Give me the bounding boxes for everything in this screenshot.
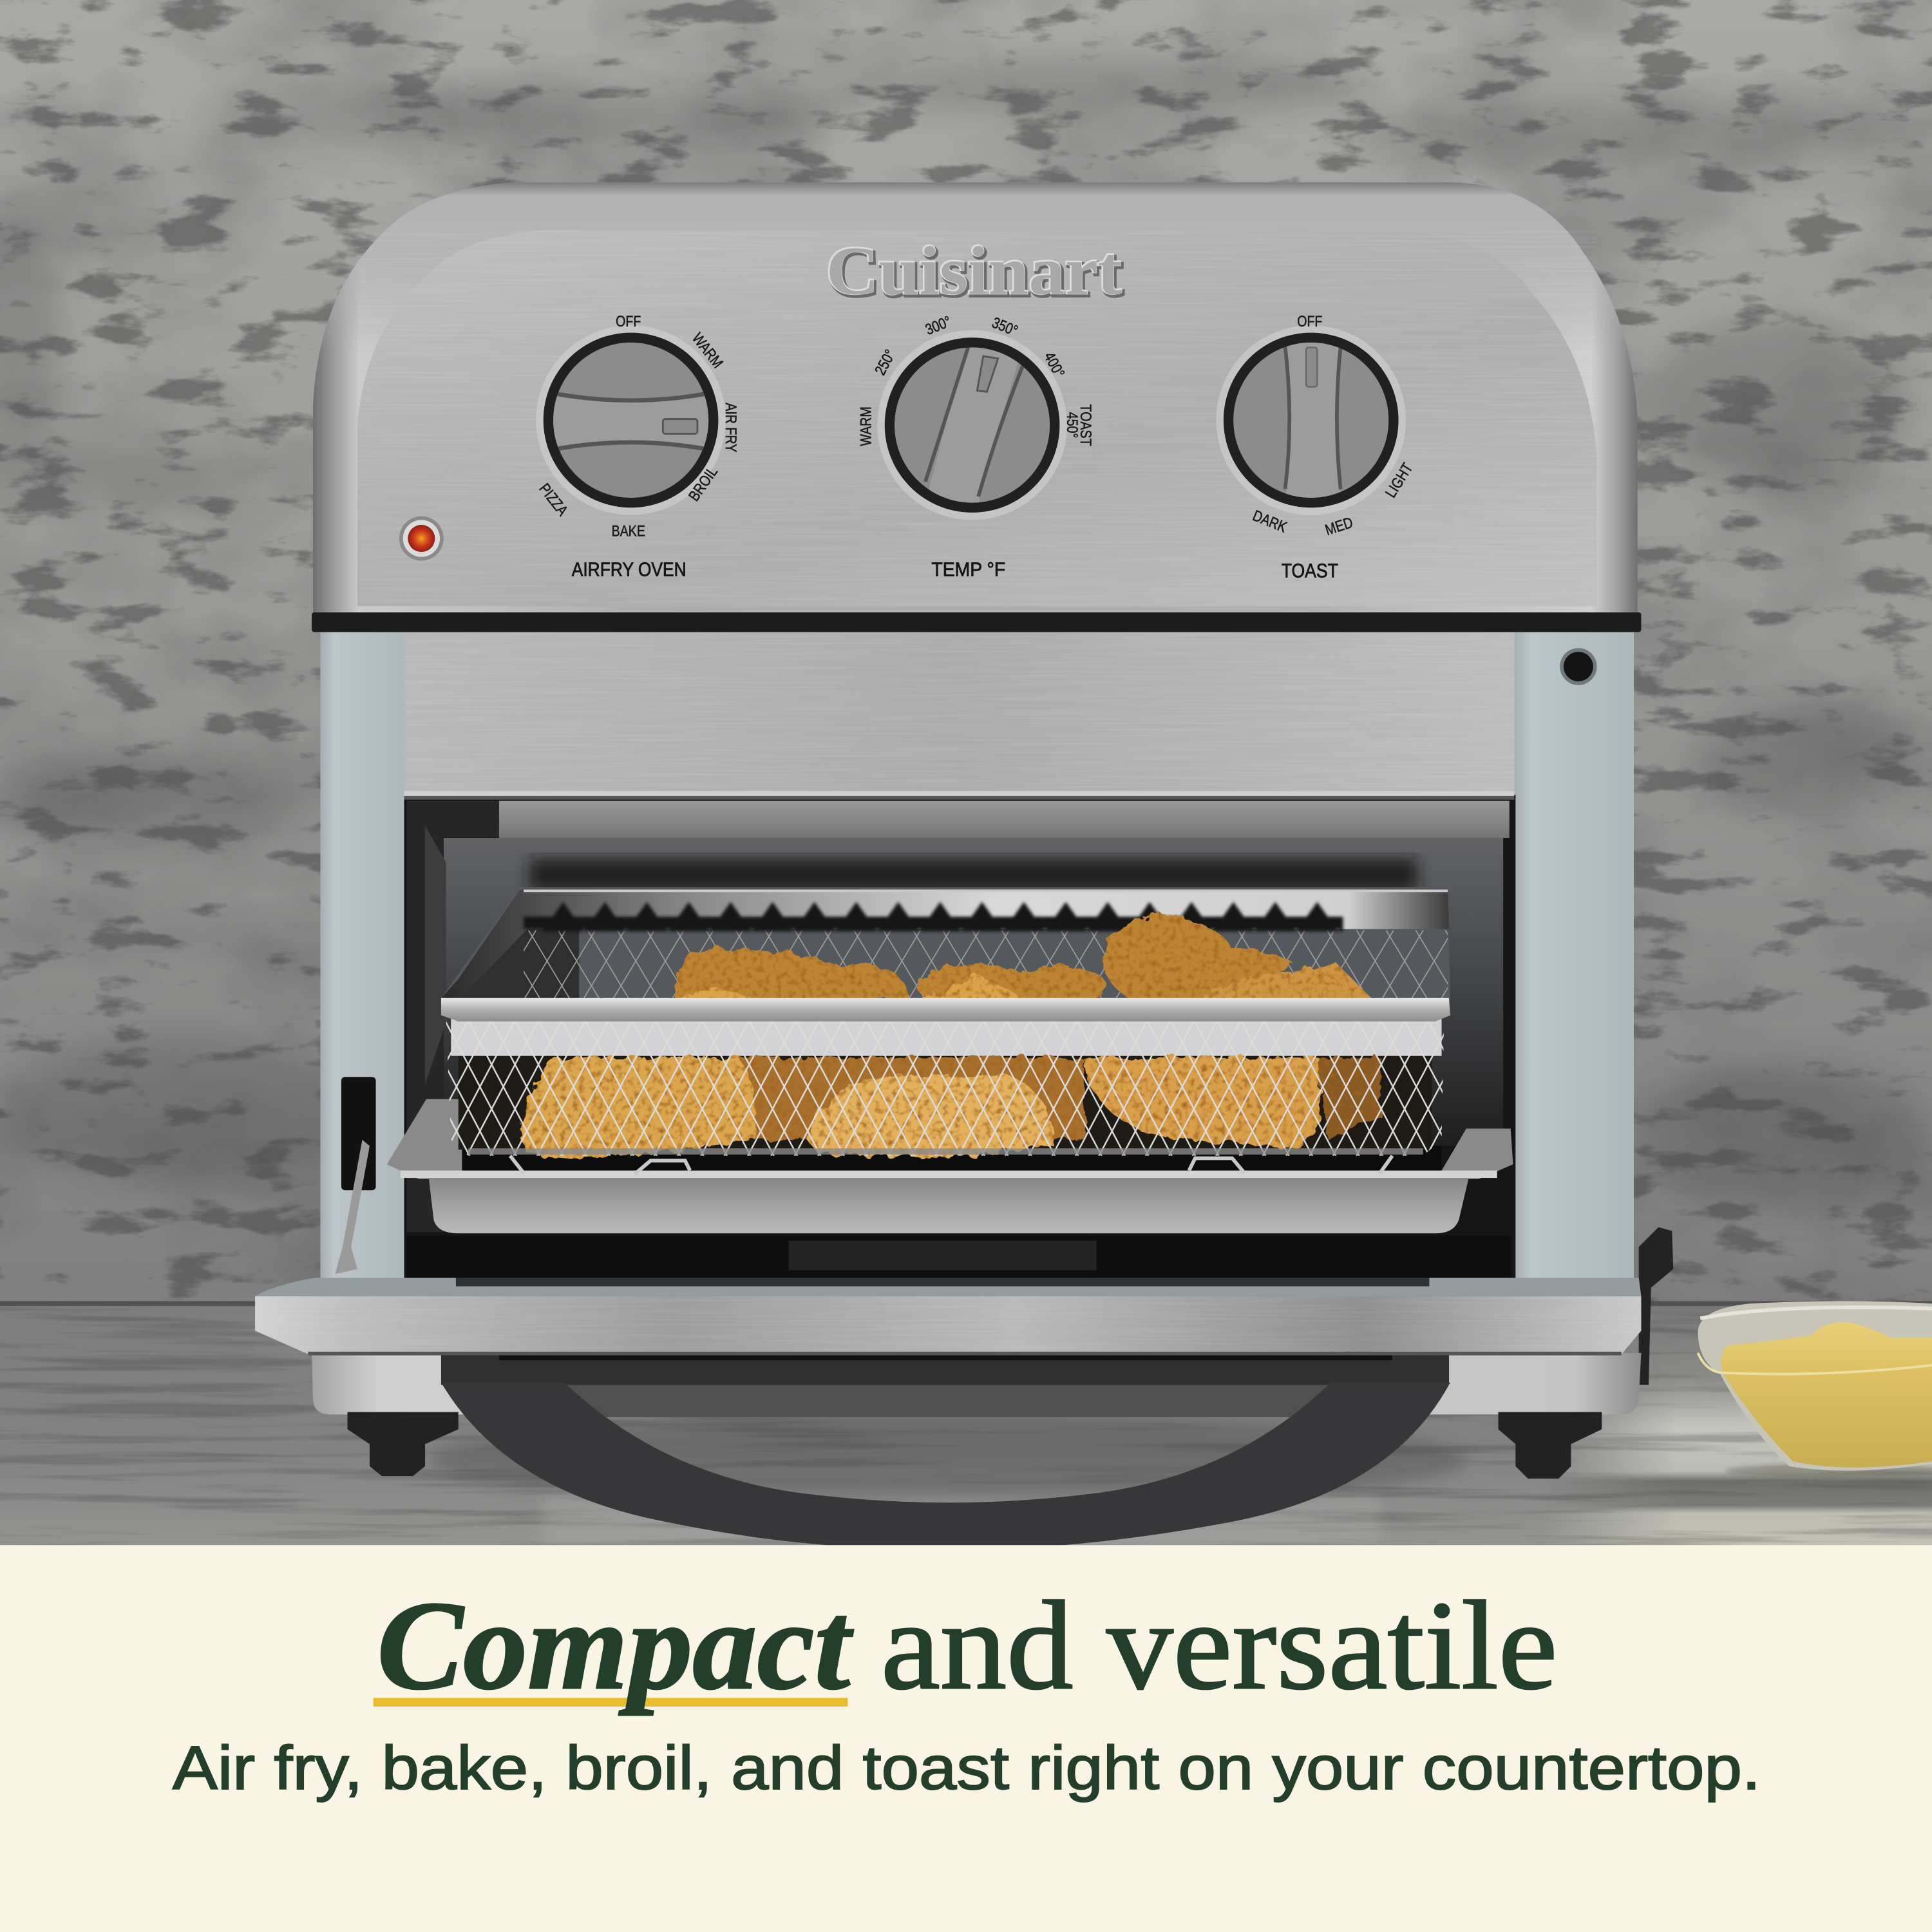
airfry oven dial labels: AIR FRY [722,402,740,453]
bottom wire [468,1148,1423,1155]
oven body [320,629,1634,1287]
headline: and versatile [881,1575,1557,1716]
housing outer shell [313,182,1638,614]
toast dial labels: OFF [1297,312,1322,330]
temperature knob [877,330,1067,520]
headline [377,1575,1557,1716]
dial captions [572,558,1338,582]
temperature dial labels: TOAST [1077,404,1095,446]
airfry oven dial labels [536,312,740,540]
right side column [1513,629,1634,1287]
door top surface [255,1278,1641,1296]
basket feet [510,1156,1392,1174]
oven door [255,1278,1641,1356]
brand logo: Cuisinart [828,235,1123,311]
temperature dial labels [857,312,1095,446]
top housing [312,182,1641,632]
marble countertop [0,1301,1932,1550]
baking tray [387,1099,1513,1233]
toast dial labels [1250,312,1416,539]
toast dial labels: MED [1323,513,1355,539]
dial captions: TOAST [1282,560,1338,582]
airfry oven dial labels: OFF [616,312,641,330]
upper door panel [404,630,1514,800]
temperature dial labels: WARM [857,406,875,446]
dial captions: AIRFRY OVEN [572,558,687,580]
oven feet [348,1412,1602,1479]
airfry oven knob [536,325,726,515]
temperature dial labels: 450° [1063,412,1081,438]
rear nuggets [669,914,1374,1008]
caption band [0,1545,1932,1932]
left side column [320,629,406,1287]
toast dial labels: DARK [1250,506,1290,536]
ventilation screw [1560,648,1597,685]
wall background [0,0,1932,1309]
front control panel [357,231,1597,606]
air fry basket [441,887,1450,1174]
rear rim reflection [444,889,1449,1001]
reflection band [451,1019,1442,1056]
toast dial labels: LIGHT [1381,460,1416,500]
front basket interior [459,1019,1432,1150]
headline: Compact [377,1575,853,1716]
door slot and hinge [335,1077,376,1274]
glass bowl [1698,1301,1932,1471]
brand logo: Cuisinart [826,233,1122,309]
basket front rim [441,998,1450,1021]
airfry oven dial labels: PIZZA [536,480,572,519]
brand logo: Cuisinart [826,232,1121,308]
temperature dial labels: 400° [1041,349,1068,381]
airfry oven dial labels: BAKE [612,522,645,540]
airfry oven dial labels: BROIL [685,463,721,504]
rear basket wall [441,887,1450,998]
power indicator light [399,516,444,561]
temperature dial labels: 350° [990,314,1020,339]
temperature dial labels: 250° [871,346,899,378]
temperature dial labels: 300° [923,312,954,338]
subheadline: Air fry, bake, broil, and toast right on your countertop. [173,1734,1761,1803]
oven cavity [404,795,1515,1287]
toast knob [1216,325,1406,515]
black seam [312,612,1641,632]
mustard sauce [1721,1322,1932,1468]
dipping sauce bowl [1698,1301,1932,1479]
door front [255,1296,1641,1354]
headline highlight underline [374,1698,848,1707]
rear cord clip [1639,1227,1673,1385]
front mesh [446,1019,1444,1156]
airfry oven dial labels: WARM [688,329,727,372]
oven base [312,1353,1641,1414]
front nuggets [520,1057,1380,1156]
dial captions: TEMP °F [931,558,1005,580]
door handle [441,1353,1450,1550]
